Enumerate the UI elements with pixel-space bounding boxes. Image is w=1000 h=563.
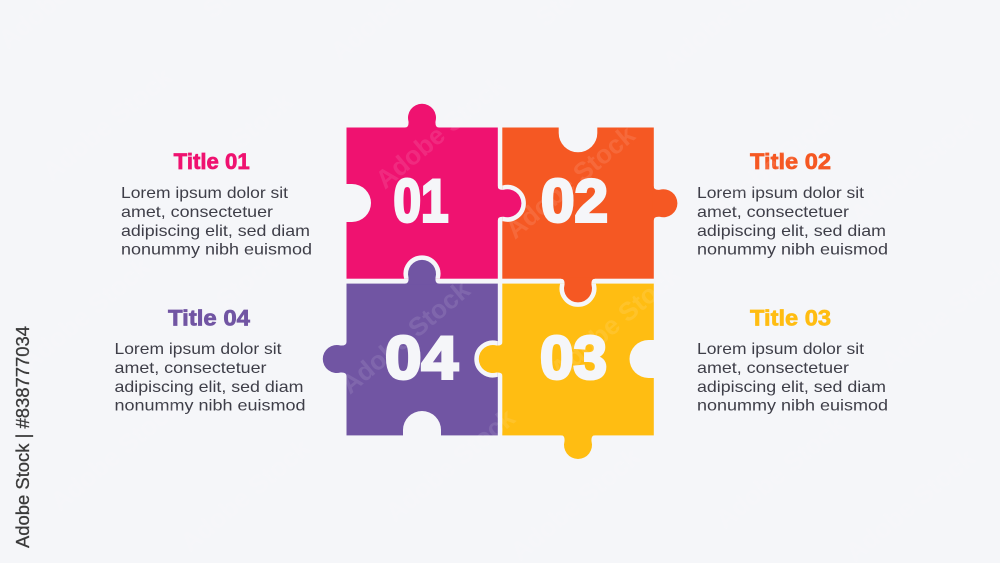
number 01: 01 xyxy=(394,168,448,234)
text block: title 03: adipiscing elit, sed diam xyxy=(697,379,886,396)
faint repeated watermark: Adobe Stock xyxy=(370,69,511,195)
faint repeated watermark: Stock xyxy=(225,86,299,155)
text block: title 02 xyxy=(697,149,888,258)
text block: title 04 xyxy=(114,306,306,414)
faint repeated watermark: Adobe Stock xyxy=(45,391,186,517)
text block: title 03: amet, consectetuer xyxy=(697,360,850,377)
text block: title 01: nonummy nibh euismod xyxy=(121,242,312,258)
faint repeated watermark: Adobe Stock xyxy=(37,61,178,187)
puzzle piece 03 xyxy=(502,284,655,459)
interlocking tab: 02 into 03 xyxy=(561,278,595,302)
text block: title 04: amet, consectetuer xyxy=(114,360,267,377)
interlocking tab: 03 into 04 xyxy=(479,342,504,376)
faint repeated watermark: Adobe Stock xyxy=(505,441,646,563)
text block: title 03: nonummy nibh euismod xyxy=(697,398,888,414)
text block: title 01 xyxy=(121,149,312,258)
faint repeated watermark: Adobe Stock xyxy=(335,274,476,400)
puzzle piece 01 xyxy=(345,104,498,279)
number 03: 03 xyxy=(540,324,607,392)
number 04: 04 xyxy=(385,324,459,392)
text block: title 04: Lorem ipsum dolor sit xyxy=(114,341,282,358)
faint repeated watermark: Adobe Stock xyxy=(845,104,986,230)
text block: title 03 xyxy=(697,306,888,414)
faint repeated watermark: Adobe Stock xyxy=(380,402,521,528)
text block: title 01: amet, consectetuer xyxy=(121,204,274,221)
faint repeated watermark: Adobe Stock xyxy=(500,119,641,245)
text block: title 03: Title 03 xyxy=(750,306,831,330)
text block: title 04: Title 04 xyxy=(168,306,251,330)
text block: title 02: amet, consectetuer xyxy=(697,204,850,221)
interlocking tab: 04 into 01 xyxy=(405,260,439,285)
stock id side label: Adobe Stock | #838777034 xyxy=(13,326,33,548)
text block: title 04: adipiscing elit, sed diam xyxy=(114,379,304,396)
text block: title 02: Lorem ipsum dolor sit xyxy=(697,185,865,202)
faint repeated watermark: Adobe Stock xyxy=(545,259,686,385)
faint repeated watermark: Adobe Stock xyxy=(15,251,156,377)
text block: title 02: Title 02 xyxy=(750,149,831,174)
text block: title 01: Lorem ipsum dolor sit xyxy=(121,185,289,202)
number 02: 02 xyxy=(541,168,608,234)
text block: title 02: nonummy nibh euismod xyxy=(697,242,888,258)
interlocking tab: 01 into 02 xyxy=(497,186,521,220)
faint repeated watermark: Adobe Stock xyxy=(175,432,316,558)
text block: title 03: Lorem ipsum dolor sit xyxy=(697,341,865,358)
text block: title 01: Title 01 xyxy=(174,149,250,174)
infographic canvas xyxy=(15,104,887,548)
puzzle piece 02 xyxy=(502,126,677,279)
faint repeated watermark: Stock xyxy=(210,246,284,315)
puzzle graphic xyxy=(323,104,677,459)
faint repeated watermark: Adobe Stock xyxy=(710,409,851,535)
faint repeated watermark: Adobe Stock xyxy=(705,99,846,225)
puzzle piece 04 xyxy=(323,284,498,437)
text block: title 04: nonummy nibh euismod xyxy=(114,398,306,414)
text block: title 02: adipiscing elit, sed diam xyxy=(697,223,886,240)
text block: title 01: adipiscing elit, sed diam xyxy=(121,223,310,240)
